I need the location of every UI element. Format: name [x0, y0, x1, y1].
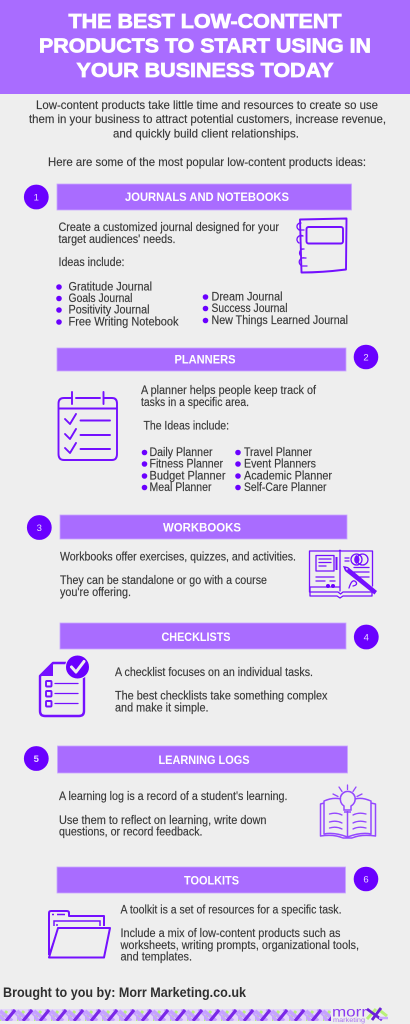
intro text: Here are some of the most popular low-content products ideas:	[48, 155, 366, 169]
title: YOUR BUSINESS TODAY	[76, 60, 334, 82]
description: Ideas include:	[58, 257, 124, 269]
description	[120, 904, 359, 964]
panel: workbooks	[27, 515, 377, 599]
logo: morr marketing: morr	[332, 1004, 367, 1020]
panel: planners	[57, 345, 378, 494]
description: and templates.	[120, 952, 192, 964]
heading bar: JOURNALS AND NOTEBOOKS	[125, 190, 289, 204]
number badge 3: 3	[37, 523, 42, 534]
idea list left: Gratitude Journal	[68, 282, 152, 294]
idea list left: Meal Planner	[150, 482, 212, 494]
number badge 2: 2	[363, 352, 369, 364]
number badge 5: 5	[34, 754, 40, 765]
icon: calendar checklist	[58, 392, 117, 460]
idea list left: Budget Planner	[150, 470, 226, 482]
number badge 1	[24, 185, 49, 209]
heading bar: LEARNING LOGS	[158, 753, 250, 767]
header banner	[0, 0, 410, 94]
description: Workbooks offer exercises, quizzes, and activities.	[60, 552, 296, 564]
idea list right: New Things Learned Journal	[212, 315, 348, 327]
footer credit: Brought to you by: Morr Marketing.co.uk	[3, 985, 246, 1000]
footer pattern strip	[0, 1009, 331, 1021]
idea list right: Travel Planner	[244, 447, 312, 459]
idea list left: Daily Planner	[150, 447, 213, 459]
icon: folder	[49, 911, 110, 958]
icon: notebook	[297, 218, 346, 272]
icon: book with lightbulb	[320, 785, 376, 838]
idea list left	[56, 282, 179, 328]
idea list left: Goals Journal	[68, 293, 132, 305]
description	[59, 791, 288, 838]
heading bar	[58, 746, 348, 773]
description: A checklist focuses on an individual tasks.	[115, 667, 313, 679]
description: A planner helps people keep track of	[141, 385, 317, 397]
description: target audiences' needs.	[58, 234, 176, 246]
intro text: Low-content products take little time and resources to create so use	[36, 98, 378, 112]
description: and make it simple.	[115, 702, 208, 714]
icon: open workbook with pen	[310, 550, 377, 598]
description: A learning log is a record of a student's learning.	[59, 791, 288, 803]
idea list right	[235, 447, 332, 494]
number badge 5	[24, 746, 49, 771]
logo: morr marketing: marketing	[333, 1017, 365, 1024]
description: Include a mix of low-content products such as	[120, 928, 341, 940]
number badge 6: 6	[363, 874, 369, 886]
title	[39, 11, 371, 82]
idea list right: Academic Planner	[244, 470, 332, 482]
title: THE BEST LOW-CONTENT	[68, 11, 342, 33]
idea list left: Positivity Journal	[68, 304, 150, 316]
icon: checklist	[40, 655, 90, 716]
description: you're offering.	[60, 587, 131, 599]
intro text: and quickly build client relationships.	[113, 126, 299, 140]
description: The Ideas include:	[144, 420, 229, 432]
number badge 4	[354, 625, 379, 649]
description: Use them to reflect on learning, write down	[59, 815, 266, 827]
number badge 3	[27, 515, 52, 540]
description: Create a customized journal designed for your	[58, 222, 279, 234]
description: The best checklists take something complex	[115, 690, 328, 702]
number badge 6	[354, 867, 378, 891]
panel: learning logs	[24, 746, 376, 838]
idea list right: Success Journal	[212, 303, 288, 315]
idea list right: Event Planners	[244, 458, 316, 470]
number badge 4: 4	[364, 632, 369, 644]
heading bar	[57, 184, 352, 210]
heading bar	[60, 623, 346, 649]
heading bar: WORKBOOKS	[163, 520, 241, 534]
description: questions, or record feedback.	[59, 826, 202, 838]
description: tasks in a specific area.	[141, 397, 249, 409]
idea list right: Self-Care Planner	[244, 482, 327, 494]
description	[58, 222, 279, 269]
heading bar: TOOLKITS	[184, 874, 239, 888]
heading bar: PLANNERS	[174, 352, 236, 366]
idea list left: Fitness Planner	[150, 458, 223, 470]
logo: morr marketing	[332, 1004, 388, 1024]
heading bar	[57, 867, 346, 893]
description: A toolkit is a set of resources for a specific task.	[120, 904, 342, 916]
idea list left: Free Writing Notebook	[68, 316, 179, 328]
panel: journals and notebooks	[24, 184, 352, 328]
idea list right	[203, 292, 348, 327]
title: PRODUCTS TO START USING IN	[39, 36, 371, 58]
description: worksheets, writing prompts, organizational tools,	[120, 940, 359, 952]
intro text	[29, 98, 386, 169]
idea list right: Dream Journal	[212, 292, 282, 304]
number badge 2	[354, 345, 378, 369]
intro text: them in your business to attract potential customers, increase revenue,	[29, 112, 386, 126]
description	[141, 385, 317, 432]
heading bar	[60, 515, 347, 539]
heading bar: CHECKLISTS	[162, 630, 230, 644]
panel: toolkits	[49, 867, 378, 964]
description: They can be standalone or go with a course	[60, 575, 267, 587]
description	[115, 667, 328, 714]
panel: checklists	[40, 623, 379, 716]
heading bar	[57, 348, 346, 371]
number badge 1: 1	[34, 192, 39, 204]
idea list left	[142, 447, 226, 494]
description	[60, 552, 296, 599]
